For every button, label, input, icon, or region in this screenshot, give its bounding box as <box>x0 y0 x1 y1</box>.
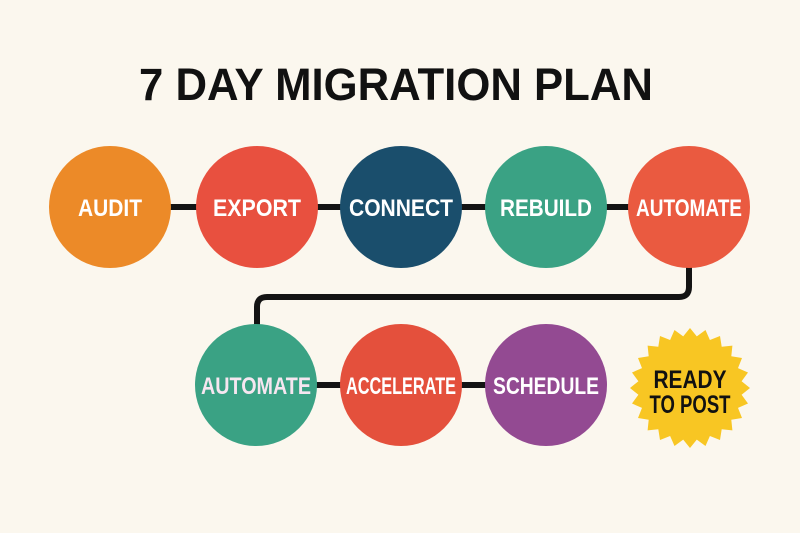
step: export: EXPORT <box>213 195 301 222</box>
step: accelerate <box>340 324 462 446</box>
badge: ready to post <box>630 328 750 448</box>
step: connect <box>340 146 462 268</box>
step: connect: CONNECT <box>349 195 453 222</box>
step: accelerate: ACCELERATE <box>346 373 456 400</box>
step: audit: AUDIT <box>78 195 142 222</box>
badge: ready to post: TO POST <box>650 391 730 419</box>
step: audit <box>49 146 171 268</box>
step: automate (row 1): AUTOMATE <box>636 195 742 222</box>
step: automate (row 1) <box>628 146 750 268</box>
step: schedule <box>485 324 607 446</box>
step: schedule: SCHEDULE <box>493 373 599 400</box>
step: automate (row 2): AUTOMATE <box>201 373 311 400</box>
step: export <box>196 146 318 268</box>
title: 7 DAY MIGRATION PLAN <box>139 59 653 110</box>
badge: ready to post: READY <box>654 366 727 394</box>
connector lines <box>110 207 689 385</box>
step: automate (row 2) <box>195 324 317 446</box>
step: rebuild <box>485 146 607 268</box>
step: rebuild: REBUILD <box>500 195 592 222</box>
